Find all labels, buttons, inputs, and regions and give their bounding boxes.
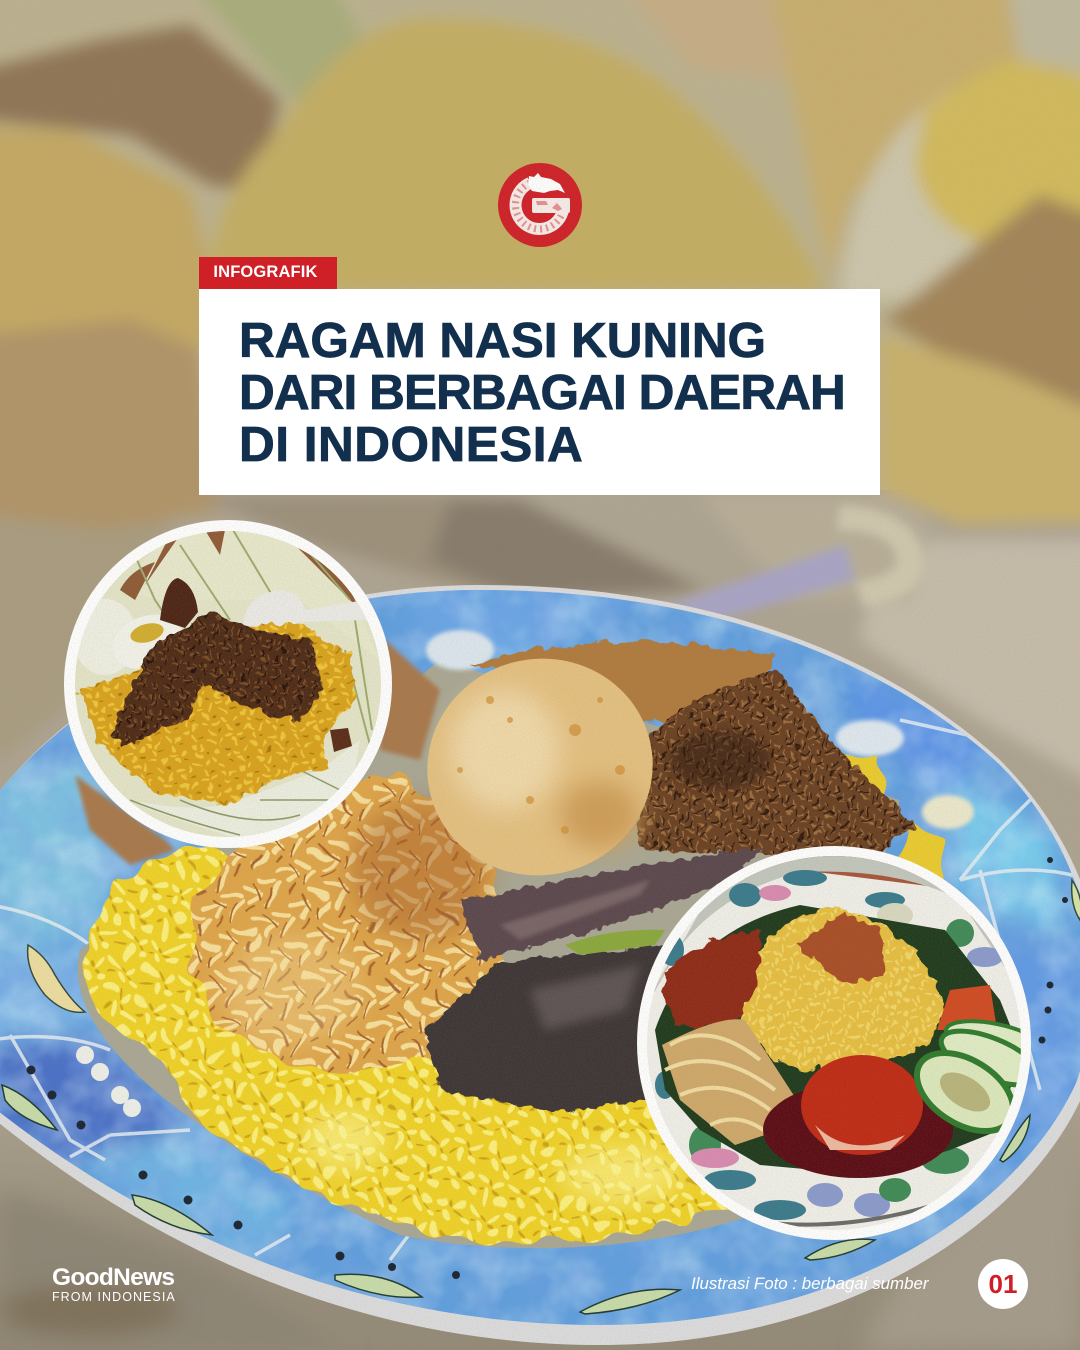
dark eggplant pieces xyxy=(425,848,765,1112)
noodles xyxy=(662,1019,800,1145)
category tag xyxy=(199,257,337,289)
title: DI INDONESIA xyxy=(239,417,583,472)
egg xyxy=(78,599,134,675)
boiled egg xyxy=(403,633,677,901)
crispy shallots behind egg xyxy=(470,642,775,730)
plate well shadow xyxy=(78,660,900,1248)
sauce and egg xyxy=(763,1082,953,1178)
banana leaf xyxy=(655,905,1020,1175)
photo circle 2: tumpeng plate xyxy=(637,840,1047,1240)
brand logo: FROM INDONESIA xyxy=(52,1290,176,1304)
brand logo: GoodNews xyxy=(52,1264,174,1291)
title card xyxy=(199,289,880,495)
page number xyxy=(978,1259,1028,1309)
nasi kuning food xyxy=(75,633,945,1242)
plate decoration xyxy=(2,630,1080,1314)
cucumber xyxy=(944,1019,1021,1061)
fried tempeh xyxy=(75,640,440,865)
title xyxy=(239,313,845,472)
spoon xyxy=(610,505,925,645)
faded food backdrop xyxy=(0,0,1080,820)
fried coconut serundeng xyxy=(190,770,505,1075)
brand logo xyxy=(52,1264,176,1304)
logo emblem xyxy=(498,163,582,247)
yellow rice xyxy=(84,755,945,1242)
plate xyxy=(0,585,1080,1345)
table surface xyxy=(0,490,1080,1350)
page number: 01 xyxy=(989,1269,1017,1299)
fried shallots xyxy=(795,912,884,985)
plate border pattern xyxy=(655,870,1003,1225)
title: RAGAM NASI KUNING xyxy=(239,313,766,368)
plate blue band xyxy=(0,585,1080,1330)
shredded beef abon xyxy=(640,670,915,855)
spoon xyxy=(243,590,368,630)
photo circle 1: nasi kuning with abon xyxy=(60,520,400,850)
rice mound xyxy=(738,906,945,1070)
sambal xyxy=(660,930,760,1030)
category tag: INFOGRAFIK xyxy=(213,263,318,281)
title: DARI BERBAGAI DAERAH xyxy=(239,365,845,420)
photo credit: Ilustrasi Foto : berbagai sumber xyxy=(691,1274,929,1293)
